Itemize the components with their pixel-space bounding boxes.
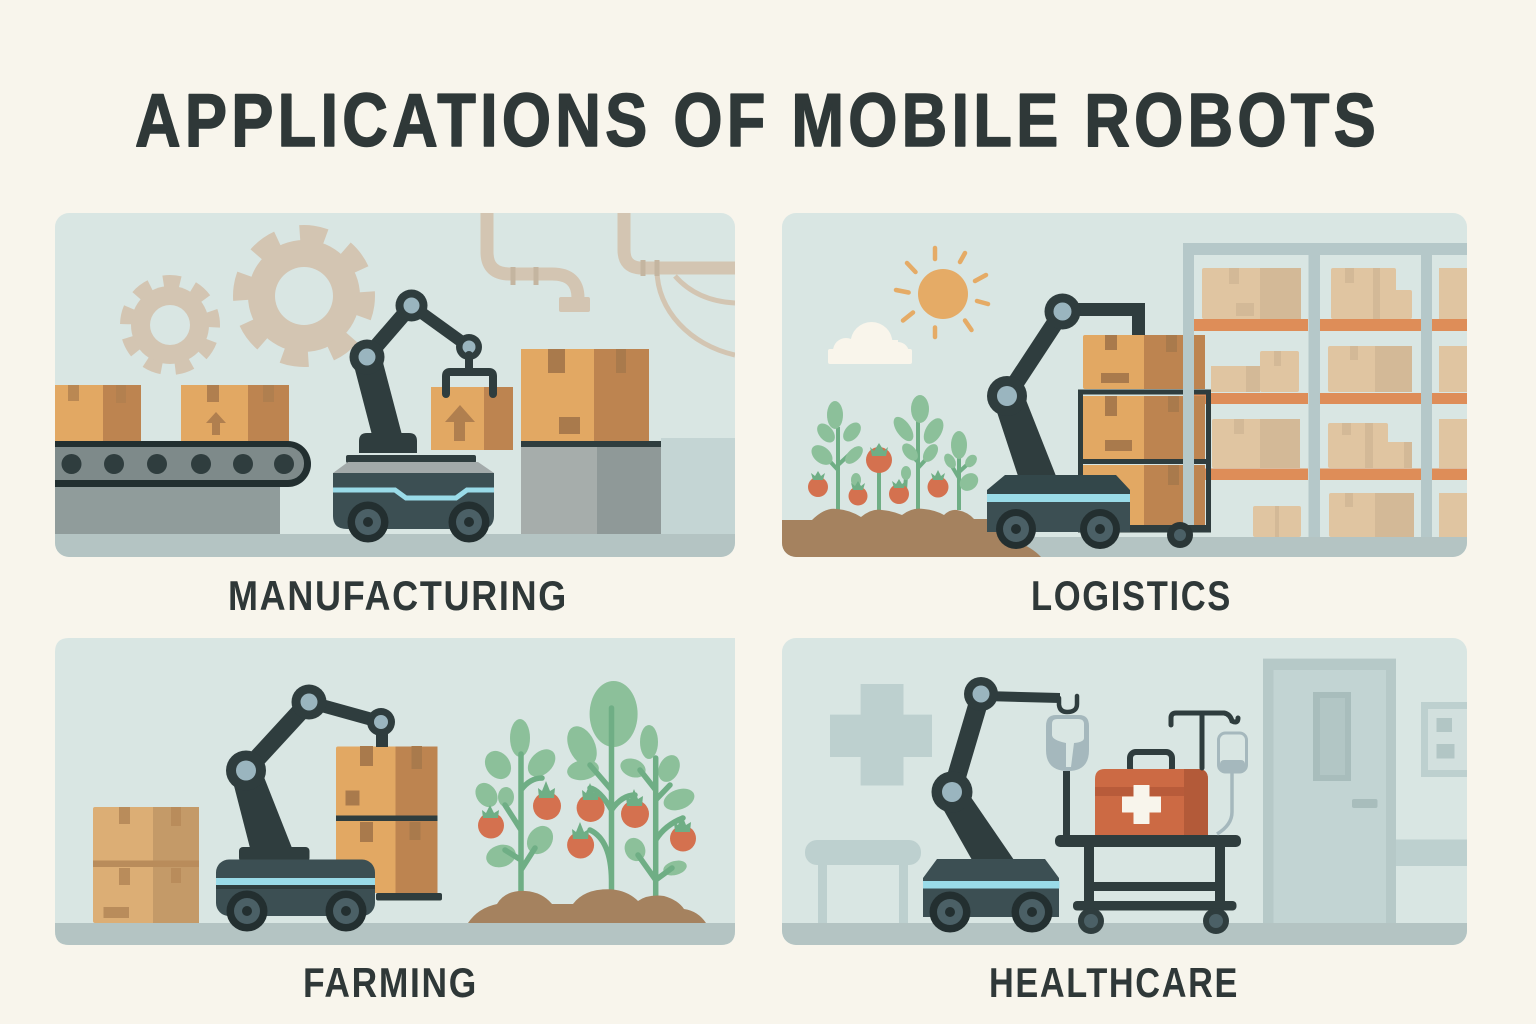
- icon: small gear: [120, 275, 220, 375]
- floor: [55, 923, 735, 945]
- panel: manufacturing: [20, 213, 735, 557]
- label: logistics: LOGISTICS: [1031, 572, 1232, 619]
- icon: large gear: [234, 226, 374, 366]
- medical cart: [1055, 835, 1241, 934]
- robot: logistics: [987, 294, 1145, 549]
- robot: manufacturing: [333, 290, 494, 542]
- first aid case: [1095, 752, 1208, 835]
- right box stack on fork: [336, 746, 442, 900]
- label: healthcare: HEALTHCARE: [989, 959, 1239, 1006]
- wall band: [1396, 840, 1467, 866]
- left box stack: [93, 807, 199, 923]
- warehouse shelving: [1183, 243, 1467, 537]
- pedestal and large box: [521, 349, 735, 534]
- plants and tomatoes: [808, 395, 982, 510]
- pipes: [487, 213, 735, 355]
- left IV bag: [1046, 715, 1089, 835]
- floor: [782, 923, 1467, 945]
- box on conveyor with arrow: [181, 385, 289, 441]
- panel: healthcare: [782, 638, 1467, 945]
- floor: [782, 537, 1467, 557]
- tomato plants: [468, 681, 706, 923]
- panel: farming: [55, 638, 735, 945]
- icon: cloud: [828, 322, 912, 364]
- icon: sun: [896, 248, 988, 337]
- panel: logistics: [782, 213, 1467, 557]
- wall picture: [1421, 702, 1467, 777]
- door: [1263, 659, 1396, 923]
- conveyor belt: [55, 441, 311, 534]
- robot: healthcare: [923, 677, 1077, 932]
- box on conveyor left: [55, 385, 141, 441]
- soil mound: [782, 509, 1041, 557]
- gripped box: [431, 387, 513, 450]
- IV stand and right bag: [1171, 713, 1246, 834]
- shelved boxes: [1202, 268, 1467, 537]
- label: manufacturing: MANUFACTURING: [228, 572, 568, 619]
- bench: [805, 840, 921, 923]
- wall cross: [830, 684, 932, 786]
- label: farming: FARMING: [303, 959, 478, 1006]
- stacked boxes on cart: [1078, 243, 1211, 548]
- robot: farming: [216, 684, 395, 932]
- floor: [55, 534, 735, 557]
